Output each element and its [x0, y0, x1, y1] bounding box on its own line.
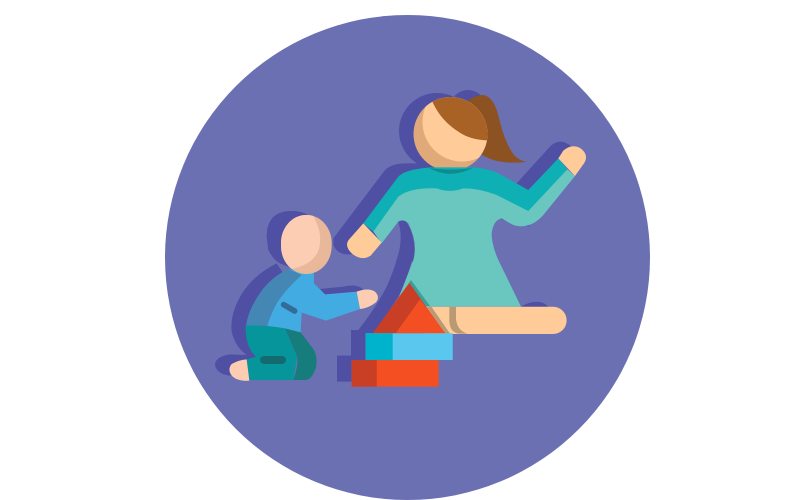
baby	[229, 269, 378, 381]
leg shadow beside triangle	[427, 307, 450, 334]
jacket	[246, 269, 360, 332]
head	[414, 97, 488, 168]
middle block	[366, 333, 453, 360]
hand	[357, 289, 378, 309]
leg	[425, 307, 567, 334]
foot	[229, 359, 249, 381]
baby head	[280, 213, 332, 274]
pants patch	[260, 356, 286, 364]
sleeves and shoulders	[363, 158, 567, 232]
bottom block	[352, 360, 439, 387]
knee crease	[449, 307, 467, 334]
woman	[347, 82, 586, 334]
triangle shadow	[409, 280, 430, 306]
background circle	[165, 15, 650, 500]
left hand	[347, 223, 382, 258]
ponytail	[468, 95, 527, 163]
block tower	[352, 280, 453, 387]
triangle highlight	[396, 299, 445, 333]
jacket pocket	[284, 305, 295, 311]
pants	[246, 326, 297, 380]
baby shadow	[215, 211, 363, 376]
pants shade	[285, 328, 317, 380]
jacket back	[246, 269, 302, 326]
illustration: mother and baby playing with blocks	[165, 15, 650, 500]
right hand	[558, 146, 586, 176]
dress	[373, 169, 575, 307]
woman shadow	[333, 90, 572, 382]
neckline	[428, 168, 473, 174]
triangle block	[373, 283, 445, 333]
